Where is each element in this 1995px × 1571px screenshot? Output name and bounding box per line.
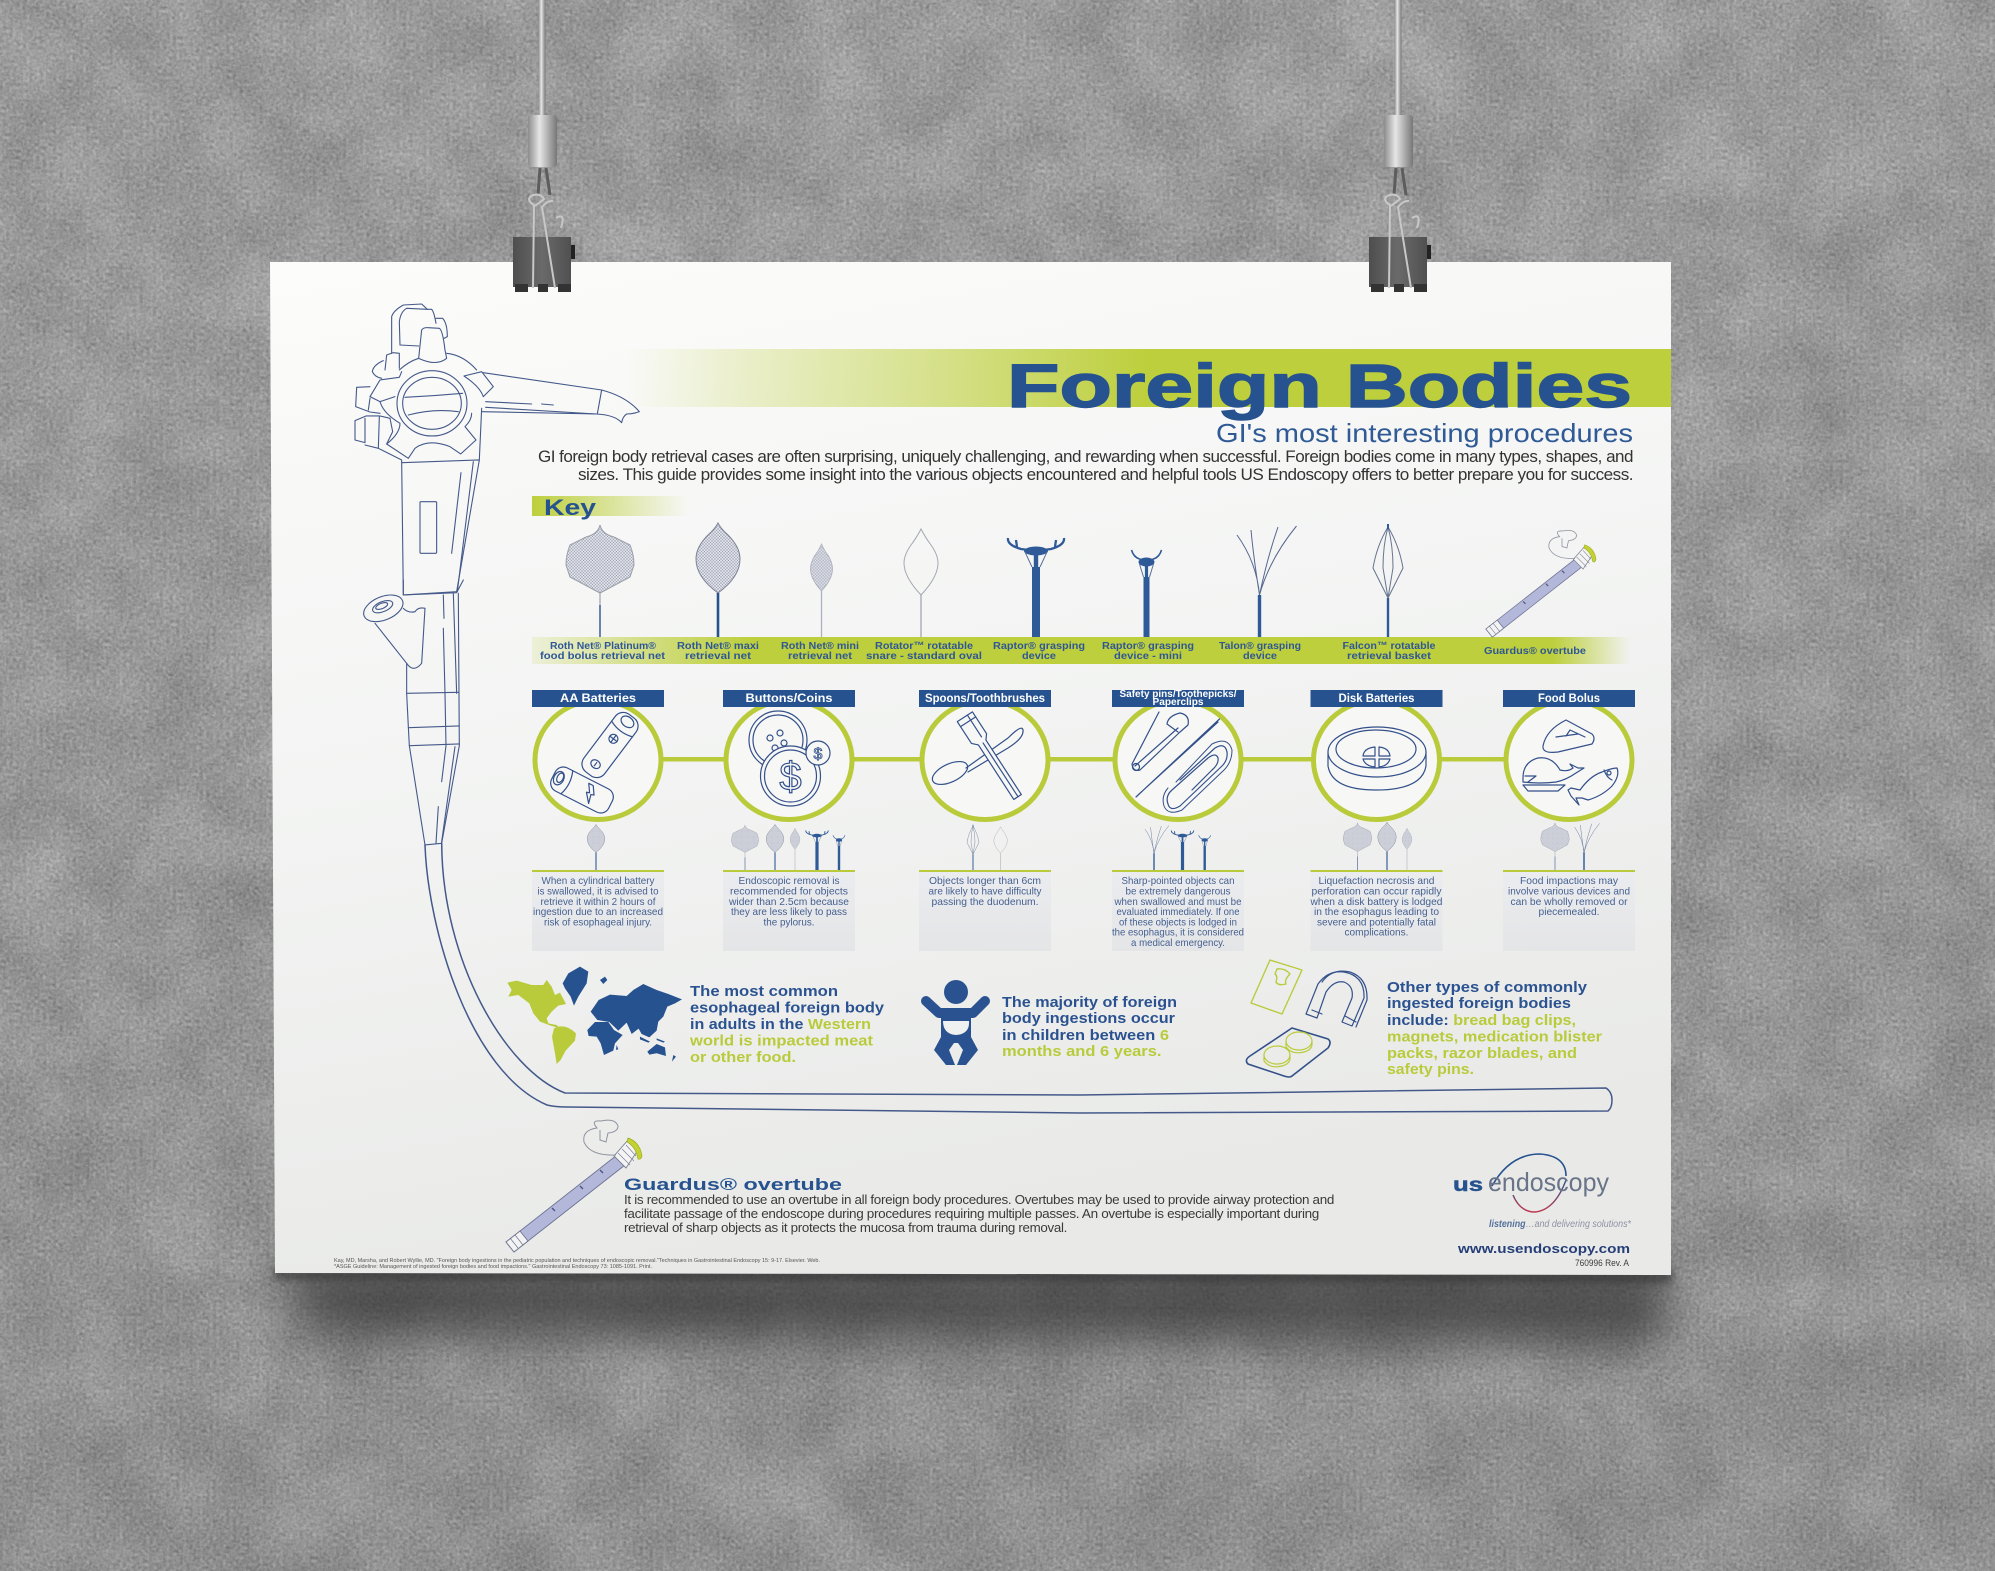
column: Safety pins/Toothepicks/Paperclips: Safety pins/Toothepicks/ bbox=[1120, 689, 1237, 700]
fact: adults: in adults in the Western bbox=[690, 1016, 871, 1033]
column: Safety pins/Toothepicks/Paperclips: the esophagus, it is considered bbox=[1112, 928, 1244, 938]
key device: Falcon: Falcon™ rotatable bbox=[1342, 640, 1436, 652]
column: Safety pins/Toothepicks/Paperclips: Paperclips bbox=[1152, 697, 1204, 708]
column: Spoons/Toothbrushes: Spoons/Toothbrushes bbox=[925, 693, 1045, 705]
column: Buttons/Coins: they are less likely to pass bbox=[731, 907, 847, 918]
column: Spoons/Toothbrushes: passing the duodenum. bbox=[932, 897, 1038, 908]
title band bbox=[626, 349, 1671, 407]
key device: Raptor: Raptor® grasping bbox=[993, 640, 1085, 652]
title: Foreign Bodies bbox=[1007, 352, 1632, 420]
fact: other types bbox=[1387, 979, 1602, 1078]
endoscope illustration bbox=[355, 304, 1612, 1113]
column: Buttons/Coins: the pylorus. bbox=[764, 918, 814, 928]
key device: Rotator snare: Rotator™ rotatable bbox=[875, 640, 973, 652]
key device: Roth Net Platinum: Roth Net® Platinum® bbox=[550, 640, 656, 652]
fact: other types: safety pins. bbox=[1387, 1061, 1474, 1078]
column: Disk Batteries: perforation can occur rapidly bbox=[1312, 886, 1442, 898]
fact: other types: magnets, medication blister bbox=[1387, 1028, 1602, 1046]
key device: Raptor mini bbox=[1102, 550, 1194, 662]
key device: Rotator snare bbox=[866, 529, 982, 662]
text: Sharp-pointed objects can bbox=[1122, 876, 1235, 887]
hanging cable and clip: right bbox=[1369, 0, 1431, 292]
column: Disk Batteries: Disk Batteries bbox=[1338, 693, 1414, 705]
fact: children: in children between 6 bbox=[1002, 1027, 1169, 1044]
column: Disk Batteries: severe and potentially fatal bbox=[1317, 918, 1436, 928]
column: Buttons/Coins: recommended for objects bbox=[730, 886, 848, 898]
icon: magnet bbox=[1306, 971, 1367, 1027]
column: AA Batteries bbox=[532, 690, 664, 951]
text: Liquefaction necrosis and bbox=[1318, 876, 1435, 887]
column: Safety pins/Toothepicks/Paperclips bbox=[1112, 689, 1244, 951]
fact: children bbox=[1002, 994, 1177, 1060]
fact: other types: include: bread bag clips, bbox=[1387, 1012, 1576, 1029]
footnotes bbox=[334, 1258, 820, 1270]
small device icons under the circles bbox=[587, 822, 1600, 870]
key device: Talon: Talon® grasping bbox=[1219, 640, 1301, 652]
fact: adults: world is impacted meat bbox=[689, 1032, 873, 1050]
fact: children: The majority of foreign bbox=[1002, 994, 1177, 1011]
logo: US Endoscopy: us bbox=[1453, 1175, 1483, 1196]
key device: Roth Net mini: retrieval net bbox=[788, 650, 853, 662]
column: Disk Batteries: complications. bbox=[1344, 928, 1408, 938]
intro text: sizes. This guide provides some insight into the various objects encountered and helpful tools US Endoscopy offers to better prepare you for success. bbox=[578, 466, 1633, 484]
key device: Roth Net mini bbox=[781, 544, 859, 662]
column: Safety pins/Toothepicks/Paperclips: be extremely dangerous bbox=[1126, 886, 1230, 898]
column: Spoons/Toothbrushes bbox=[919, 690, 1051, 951]
icon: bread bag clip bbox=[1251, 960, 1302, 1014]
key device: Guardus overtube bbox=[1484, 530, 1596, 657]
icon: baby bbox=[926, 980, 985, 1065]
key label strip bbox=[532, 637, 1630, 664]
column: Spoons/Toothbrushes: are likely to have difficulty bbox=[928, 886, 1042, 898]
key device: Roth Net Platinum bbox=[540, 525, 666, 662]
Guardus text bbox=[624, 1193, 1334, 1235]
key device: Roth Net maxi: Roth Net® maxi bbox=[677, 640, 759, 652]
column: AA Batteries: is swallowed, it is advised to bbox=[538, 886, 659, 898]
key device: Falcon: retrieval basket bbox=[1347, 650, 1432, 662]
key device: Roth Net maxi: retrieval net bbox=[685, 650, 752, 662]
column: Food Bolus: can be wholly removed or bbox=[1510, 897, 1628, 908]
key device: Raptor mini: Raptor® grasping bbox=[1102, 640, 1194, 652]
hanging cable and clip: left bbox=[513, 0, 575, 292]
column: Disk Batteries: when a disk battery is lodged bbox=[1310, 897, 1443, 908]
logo: US Endoscopy: endoscopy bbox=[1488, 1167, 1609, 1197]
fact: other types: packs, razor blades, and bbox=[1387, 1045, 1577, 1062]
key band bbox=[532, 495, 688, 520]
fact: adults: or other food. bbox=[690, 1049, 796, 1066]
part number: 760996 Rev. A bbox=[1575, 1258, 1629, 1268]
Guardus heading: Guardus® overtube bbox=[624, 1175, 842, 1194]
icon: pin, toothpick, paperclip bbox=[1132, 712, 1232, 812]
column: Buttons/Coins: $ bbox=[814, 746, 823, 763]
column: Disk Batteries bbox=[1310, 690, 1443, 951]
column: AA Batteries: risk of esophageal injury. bbox=[544, 918, 652, 928]
icon: spoon and toothbrush bbox=[929, 712, 1025, 802]
text: Objects longer than 6cm bbox=[929, 876, 1041, 887]
Guardus text: retrieval of sharp objects as it protects the mucosa from trauma during removal. bbox=[624, 1221, 1067, 1235]
fact: children: months and 6 years. bbox=[1002, 1043, 1162, 1060]
key device: Talon: device bbox=[1243, 650, 1277, 662]
key device: Roth Net mini: Roth Net® mini bbox=[781, 640, 859, 652]
column: AA Batteries: retrieve it within 2 hours of bbox=[540, 897, 656, 908]
key device: Raptor: device bbox=[1022, 650, 1056, 662]
icon: blister pack bbox=[1246, 1028, 1330, 1077]
Guardus text: It is recommended to use an overtube in all foreign body procedures. Overtubes may be used to provide airway protection and bbox=[624, 1193, 1334, 1207]
text: When a cylindrical battery bbox=[542, 876, 655, 887]
fact: children: body ingestions occur bbox=[1002, 1010, 1175, 1027]
column: Food Bolus: Food Bolus bbox=[1538, 693, 1600, 705]
column: AA Batteries: ingestion due to an increased bbox=[533, 907, 663, 918]
poster sheet bbox=[270, 262, 1671, 1275]
column: Food Bolus: involve various devices and bbox=[1508, 886, 1630, 898]
key device: Raptor mini: device - mini bbox=[1114, 650, 1182, 662]
column: Food Bolus bbox=[1503, 690, 1635, 951]
fact: adults: The most common bbox=[690, 983, 838, 1000]
key device: Roth Net maxi bbox=[677, 523, 759, 662]
column: AA Batteries: AA Batteries bbox=[560, 693, 636, 705]
fact: other types: ingested foreign bodies bbox=[1387, 995, 1571, 1012]
key device: Falcon bbox=[1342, 524, 1436, 662]
key device: Talon bbox=[1219, 526, 1301, 662]
subtitle: GI's most interesting procedures bbox=[1216, 418, 1633, 448]
key device: Roth Net Platinum: food bolus retrieval net bbox=[540, 650, 666, 662]
key band: Key bbox=[544, 495, 597, 520]
column: Disk Batteries: in the esophagus leading to bbox=[1314, 907, 1439, 918]
Guardus text: facilitate passage of the endoscope during procedures requiring multiple passes. An overtube is especially important during bbox=[624, 1207, 1319, 1221]
column: Buttons/Coins: $ bbox=[779, 755, 802, 799]
icon: button and coins bbox=[749, 711, 830, 806]
website: www.usendoscopy.com bbox=[1457, 1242, 1630, 1256]
text: Endoscopic removal is bbox=[738, 876, 840, 887]
intro text: GI foreign body retrieval cases are often surprising, uniquely challenging, and rewarding when successful. Foreign bodies come in many types, shapes, and bbox=[538, 448, 1633, 466]
icon: world map bbox=[507, 967, 682, 1064]
fact: adults bbox=[689, 983, 885, 1066]
fact: other types: Other types of commonly bbox=[1387, 979, 1588, 996]
icon: disk battery bbox=[1328, 727, 1426, 790]
icon: Guardus overtube bbox=[506, 1120, 642, 1252]
icon: steak, chicken, fish bbox=[1523, 720, 1618, 805]
text: Food impactions may bbox=[1520, 876, 1619, 887]
footnotes: Kay, MD, Marsha, and Robert Wyllie, MD. "Foreign body ingestions in the pediatric population and techniques of endoscopic removal."Techniques in Gastrointestinal Endoscopy 15: 9-17. Elsevier. Web. bbox=[334, 1258, 820, 1264]
key device: Guardus overtube: Guardus® overtube bbox=[1484, 645, 1586, 657]
intro text bbox=[538, 448, 1633, 484]
icon: batteries bbox=[548, 708, 642, 816]
column: Safety pins/Toothepicks/Paperclips: a medical emergency. bbox=[1131, 938, 1225, 949]
poster shadow bbox=[272, 1262, 1672, 1345]
connector lines between circles bbox=[660, 757, 1507, 762]
footnotes: *ASGE Guideline: Management of ingested foreign bodies and food impactions." Gastrointestinal Endoscopy 73: 1085-1091. Print. bbox=[334, 1264, 652, 1270]
column: Food Bolus: piecemealed. bbox=[1538, 907, 1600, 918]
key device: Rotator snare: snare - standard oval bbox=[866, 650, 982, 662]
column: Buttons/Coins: Buttons/Coins bbox=[746, 693, 832, 705]
column: Safety pins/Toothepicks/Paperclips: evaluated immediately. If one bbox=[1116, 907, 1240, 918]
key device: Raptor bbox=[993, 538, 1085, 662]
logo: US Endoscopy bbox=[1453, 1154, 1632, 1230]
column: Buttons/Coins: wider than 2.5cm because bbox=[728, 897, 849, 908]
column: Safety pins/Toothepicks/Paperclips: of these objects is lodged in bbox=[1119, 918, 1237, 928]
column: Buttons/Coins bbox=[723, 690, 855, 951]
logo: US Endoscopy: listening…and delivering solutions* bbox=[1489, 1219, 1632, 1230]
fact: adults: esophageal foreign body bbox=[690, 1000, 885, 1016]
column: Safety pins/Toothepicks/Paperclips: when swallowed and must be bbox=[1114, 897, 1242, 908]
